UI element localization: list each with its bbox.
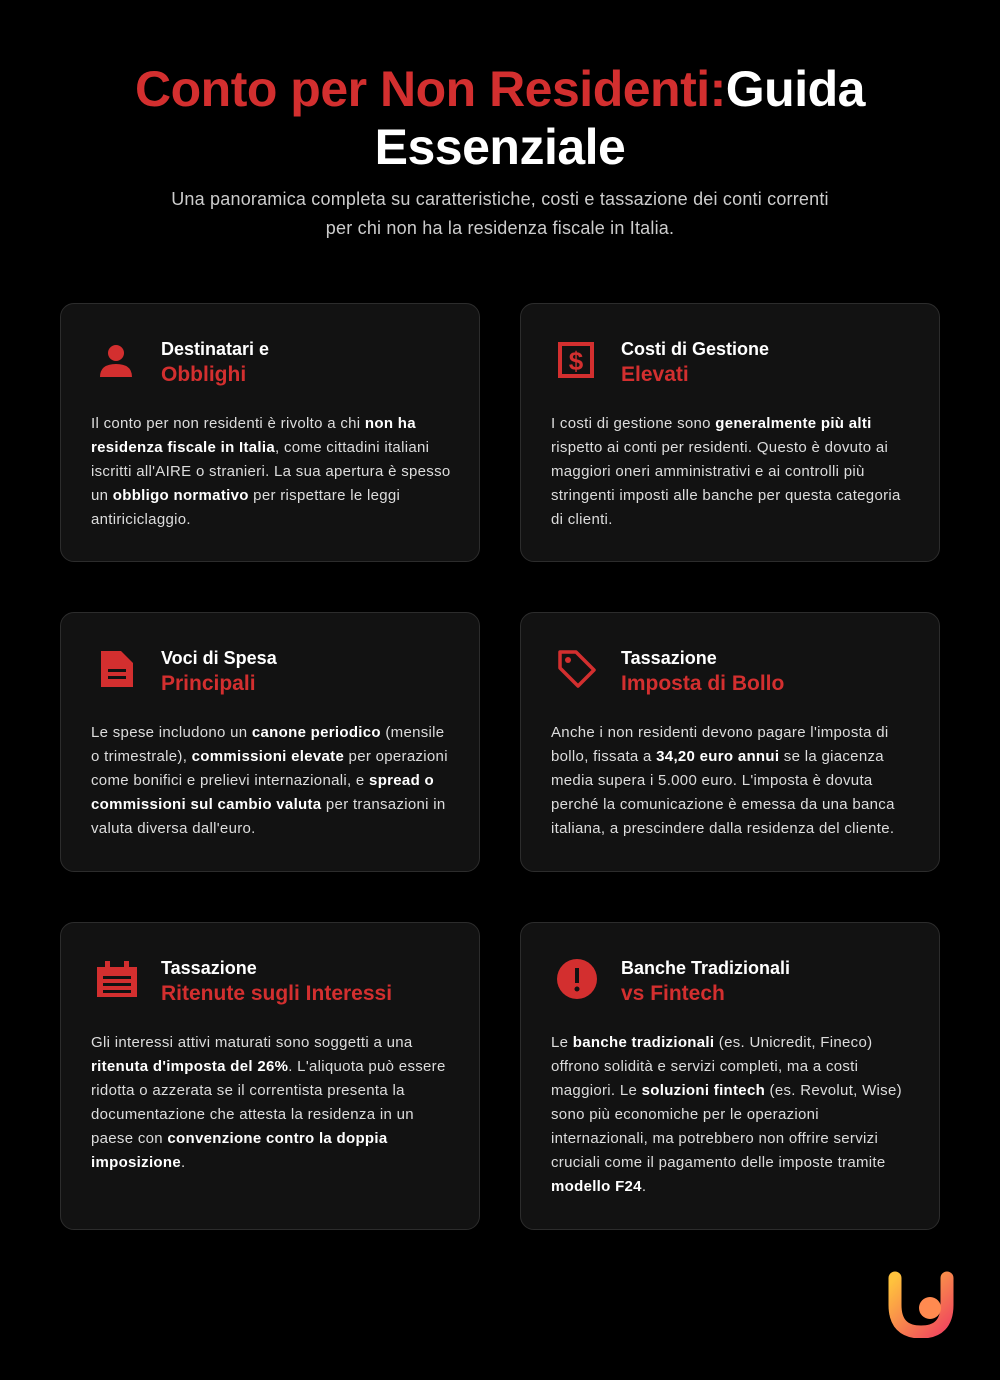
subtitle: Una panoramica completa su caratteristiche, costi e tassazione dei conti correnti per chi non ha la residenza fiscale in Italia.	[171, 189, 829, 238]
text: Anche i non residenti devono pagare l'imposta di bollo, fissata a 34,20 euro annui se la giacenza media supera i 5.000 euro. L'imposta è dovuta perché la comunicazione è emessa da una banca italiana, a prescindere dalla residenza del cliente.	[551, 724, 895, 837]
panel: destinatari	[60, 303, 480, 562]
icon: exclamation	[557, 959, 597, 999]
panel: costi	[520, 303, 940, 562]
text: I costi di gestione sono generalmente più alti rispetto ai conti per residenti. Questo è dovuto ai maggiori oneri amministrativi e ai controlli più stringenti imposti alle banche per questa categoria di clienti.	[551, 415, 901, 528]
heading: Voci di Spesa	[161, 648, 277, 668]
heading: Destinatari e	[161, 339, 269, 359]
text: Gli interessi attivi maturati sono soggetti a una ritenuta d'imposta del 26%. L'aliquota può essere ridotta o azzerata se il correntista presenta la documentazione che attesta la residenza in un paese con convenzione contro la doppia imposizione.	[91, 1034, 446, 1171]
text: Il conto per non residenti è rivolto a chi non ha residenza fiscale in Italia, come cittadini italiani iscritti all'AIRE o stranieri. La sua apertura è spesso un obbligo normativo per rispettare le leggi antiriciclaggio.	[91, 415, 451, 528]
heading	[161, 958, 392, 1005]
title: Conto per Non Residenti:Guida	[135, 61, 865, 117]
panel: banche vs fintech	[520, 922, 940, 1230]
icon: person	[100, 345, 132, 377]
heading: Imposta di Bollo	[621, 672, 784, 695]
heading	[161, 339, 269, 386]
heading	[621, 339, 769, 386]
heading	[621, 958, 790, 1005]
panel: bollo	[520, 612, 940, 872]
text: Le banche tradizionali (es. Unicredit, Fineco) offrono solidità e servizi completi, ma a costi maggiori. Le soluzioni fintech (es. Revolut, Wise) sono più economiche per le operazioni internazionali, ma potrebbero non offrire servizi cruciali come il pagamento delle imposte tramite modello F24.	[551, 1034, 902, 1195]
panel: voci di spesa	[60, 612, 480, 872]
heading: Elevati	[621, 363, 689, 386]
logo	[888, 1272, 954, 1338]
panel: ritenute	[60, 922, 480, 1230]
heading: Tassazione	[161, 958, 257, 978]
icon: money: $	[569, 346, 584, 376]
heading: Principali	[161, 672, 256, 695]
heading	[161, 648, 277, 695]
title	[135, 61, 866, 175]
icon: calendar	[97, 961, 137, 997]
heading: Costi di Gestione	[621, 339, 769, 359]
heading	[621, 648, 784, 695]
text: Le spese includono un canone periodico (mensile o trimestrale), commissioni elevate per operazioni come bonifici e prelievi internazionali, e spread o commissioni sul cambio valuta per transazioni in valuta diversa dall'euro.	[91, 724, 448, 837]
icon: money	[558, 342, 594, 378]
heading: Obblighi	[161, 363, 246, 386]
icon: tag	[558, 650, 596, 688]
heading: Ritenute sugli Interessi	[161, 982, 392, 1005]
heading: Banche Tradizionali	[621, 958, 790, 978]
title: Essenziale	[375, 119, 625, 175]
heading: vs Fintech	[621, 982, 725, 1005]
heading: Tassazione	[621, 648, 717, 668]
icon: document	[101, 651, 133, 687]
